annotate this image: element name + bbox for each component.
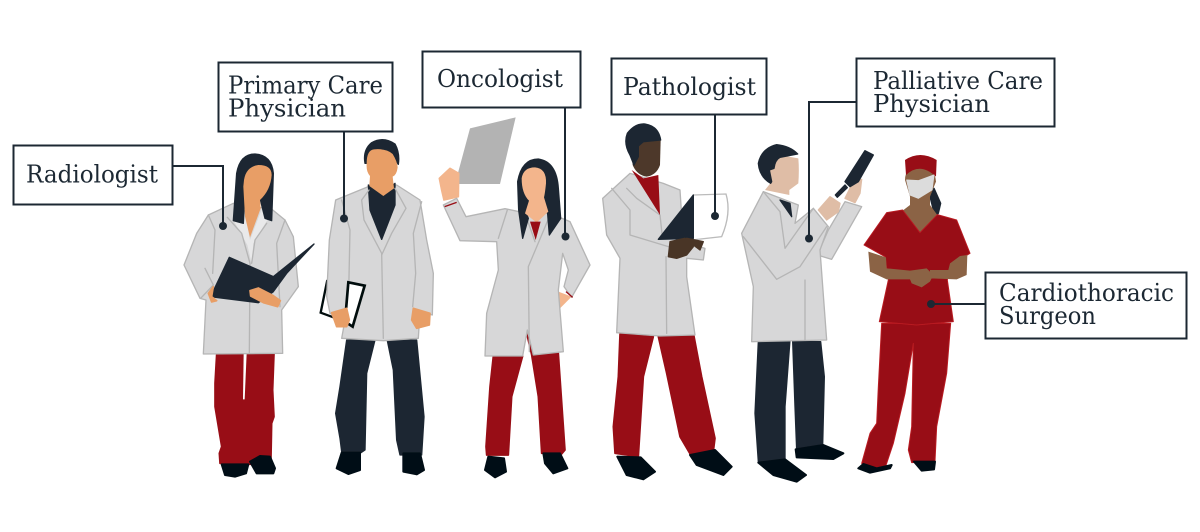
callout: primary care physician: Primary Care: [228, 70, 383, 100]
palliative physician shirt: [780, 200, 792, 217]
surgeon ponytail: [928, 188, 941, 223]
callout: pathologist: Pathologist: [623, 72, 756, 101]
oncologist hair: [518, 159, 561, 238]
physician clipboard: [345, 282, 365, 327]
callout: palliative care physician: Palliative Care: [873, 66, 1043, 95]
figure: oncologist: [439, 117, 590, 477]
palliative physician trousers: [755, 340, 824, 462]
physician hair: [365, 140, 399, 164]
pathologist coat seams: [612, 188, 668, 333]
pathologist shoes: [617, 450, 732, 479]
radiologist face: [243, 165, 272, 237]
physician trousers: [336, 340, 424, 455]
figure: cardiothoracic surgeon: [858, 155, 970, 473]
oncologist shoes: [485, 453, 567, 477]
x-ray film: [455, 117, 516, 184]
callout: cardiothoracic surgeon: [927, 272, 1186, 338]
physician coat: [327, 185, 433, 341]
pathologist paper: [692, 194, 728, 240]
callout: radiologist: Radiologist: [26, 160, 158, 188]
pathologist hands: [668, 238, 703, 258]
otoscope: [835, 151, 873, 197]
physician shoes: [337, 453, 424, 474]
physician shirt: [368, 183, 395, 239]
radiologist shoes: [222, 456, 275, 477]
palliative physician far sleeve: [817, 202, 862, 259]
oncologist face: [522, 167, 548, 223]
callout: oncologist: Oncologist: [437, 64, 563, 93]
callout: radiologist: [14, 146, 227, 230]
pathologist shirt: [632, 170, 660, 215]
oncologist hip hand: [558, 292, 572, 308]
figure: primary care physician: [321, 140, 433, 474]
pathologist hair: [626, 124, 661, 165]
callout: oncologist: [422, 52, 580, 240]
physician clipboard back: [321, 280, 333, 317]
figure: pathologist: [603, 124, 732, 479]
pathologist face: [632, 140, 661, 177]
physician hands: [332, 308, 430, 328]
surgeon cap: [905, 155, 937, 177]
figure: radiologist: [184, 154, 314, 477]
callout: primary care physician: [218, 62, 392, 222]
radiologist folder: [211, 244, 314, 303]
callout: pathologist: [612, 58, 766, 220]
callout: cardiothoracic surgeon: Cardiothoracic: [999, 278, 1174, 307]
radiologist trousers: [215, 354, 274, 464]
radiologist trouser gap: [243, 353, 247, 399]
oncologist trousers: [486, 333, 565, 455]
surgeon face: [905, 165, 936, 197]
callout: palliative care physician: Physician: [873, 89, 990, 118]
palliative physician hands: [818, 179, 862, 220]
callout: primary care physician: Physician: [228, 94, 346, 122]
figure: palliative care physician: [742, 145, 873, 482]
radiologist blouse: [233, 205, 267, 263]
radiologist coat: [184, 203, 298, 354]
surgeon shoes: [858, 462, 935, 473]
radiologist hair: [233, 154, 273, 223]
pathologist coat: [603, 173, 705, 336]
oncologist raised hand: [439, 168, 459, 200]
palliative physician coat seams: [743, 192, 827, 340]
radiologist coat seams: [201, 215, 285, 353]
radiologist hands: [208, 287, 280, 307]
oncologist shirt: [530, 222, 541, 240]
pathologist folder: [658, 195, 693, 239]
palliative physician shoes: [758, 445, 843, 482]
palliative physician hair: [758, 145, 798, 183]
pathologist trousers: [613, 333, 715, 457]
surgeon mask: [907, 175, 934, 198]
physician face: [367, 149, 398, 196]
surgeon neck: [903, 190, 937, 233]
oncologist cuffs: [445, 202, 573, 297]
palliative physician face: [765, 156, 799, 195]
palliative physician coat: [742, 192, 828, 342]
surgeon scrub top: [864, 210, 970, 325]
oncologist coat: [443, 198, 590, 356]
physician coat seams: [342, 188, 422, 338]
callout: palliative care physician: [805, 58, 1054, 242]
oncologist coat seams: [498, 210, 550, 352]
surgeon trousers: [862, 323, 951, 468]
surgeon arms: [868, 252, 967, 287]
callout: cardiothoracic surgeon: Surgeon: [999, 301, 1096, 330]
